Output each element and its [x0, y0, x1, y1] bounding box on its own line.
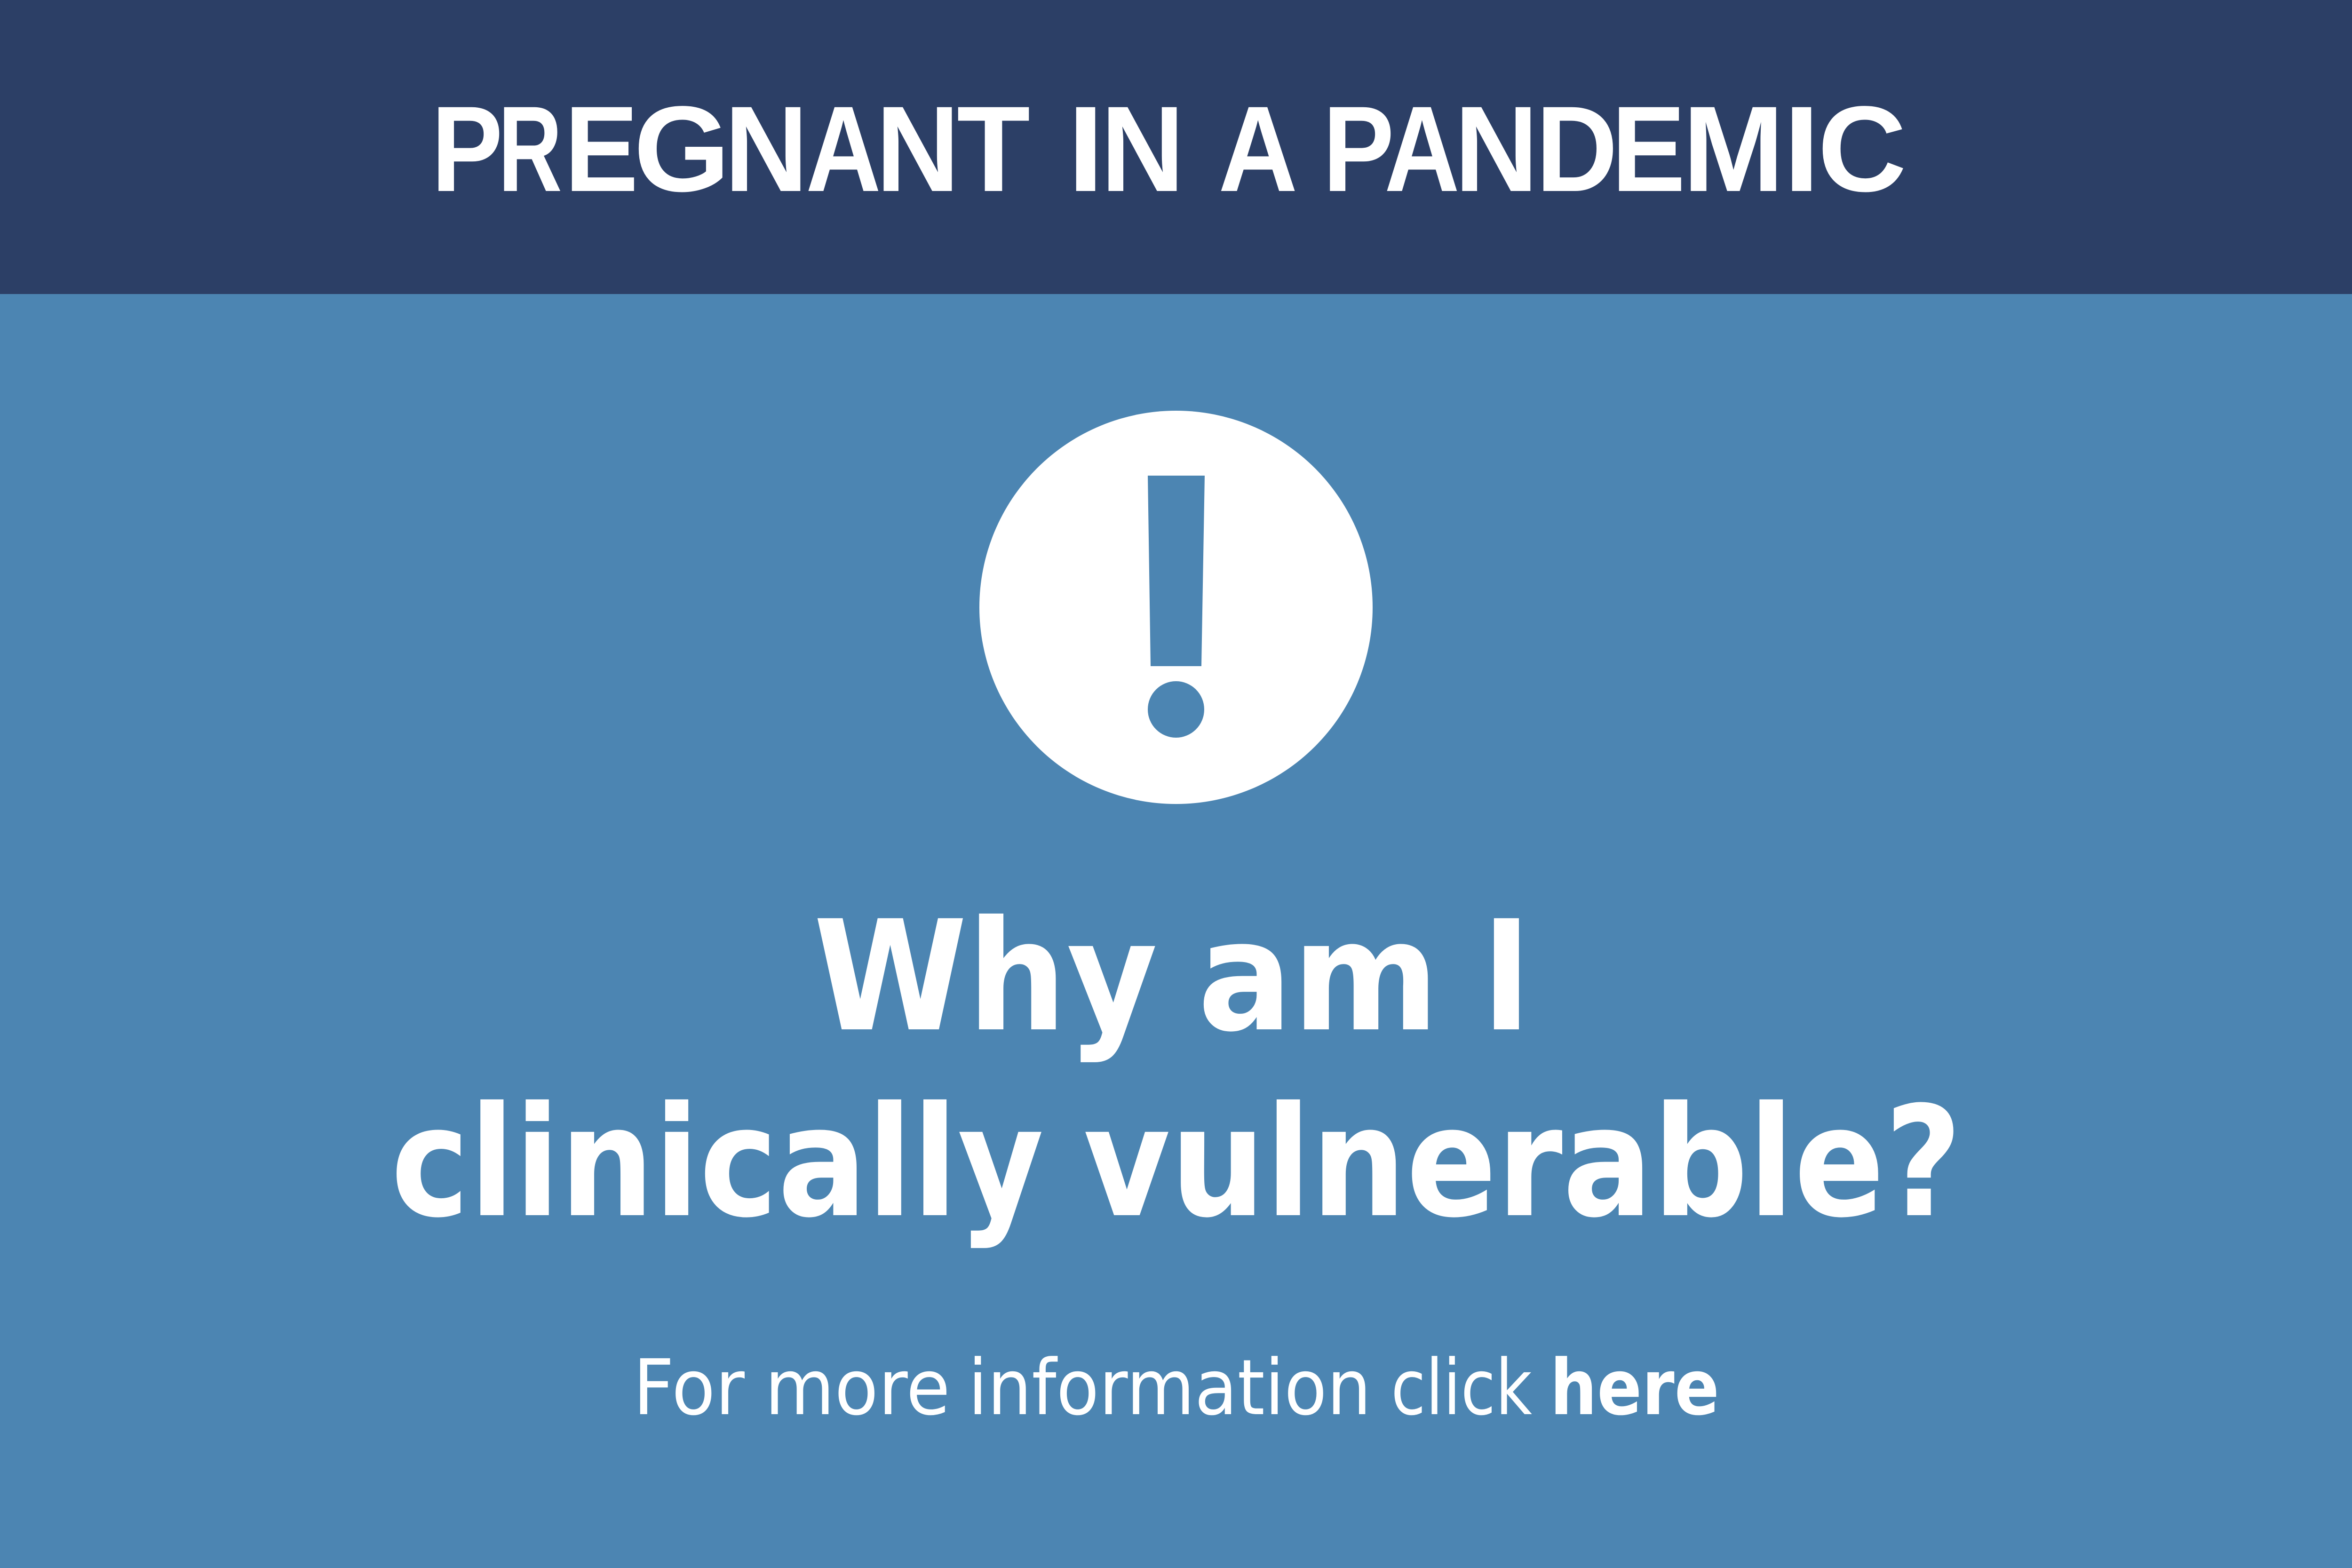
icon: exclamation mark in circle [979, 411, 1373, 804]
title: I [1067, 81, 1104, 217]
heading [391, 888, 1962, 1251]
heading: vulnerable? [1083, 1074, 1962, 1251]
title: P [1323, 81, 1394, 217]
title: A [1384, 81, 1460, 217]
title: G [634, 81, 730, 217]
title: N [1101, 81, 1184, 217]
heading: Why [813, 888, 1158, 1066]
title: N [876, 81, 960, 217]
title: P [431, 81, 503, 217]
title: D [1536, 81, 1618, 217]
call to action text: For [633, 1344, 745, 1433]
call to action text: click [1391, 1344, 1532, 1433]
call to action text: more [765, 1344, 950, 1433]
call to action text: here [1550, 1344, 1719, 1433]
call to action text: information [968, 1344, 1371, 1433]
title: M [1683, 81, 1784, 217]
title: C [1818, 81, 1907, 217]
title: A [1218, 81, 1295, 217]
heading: am [1198, 888, 1439, 1066]
heading: I [1482, 888, 1531, 1066]
title: T [957, 81, 1030, 217]
title: R [498, 81, 562, 217]
title: I [1783, 81, 1820, 217]
header band [0, 0, 2352, 294]
heading: clinically [391, 1074, 1044, 1251]
title: A [806, 81, 881, 217]
title: N [1454, 81, 1538, 217]
title: E [564, 81, 638, 217]
title: N [724, 81, 808, 217]
title: E [1612, 81, 1685, 217]
